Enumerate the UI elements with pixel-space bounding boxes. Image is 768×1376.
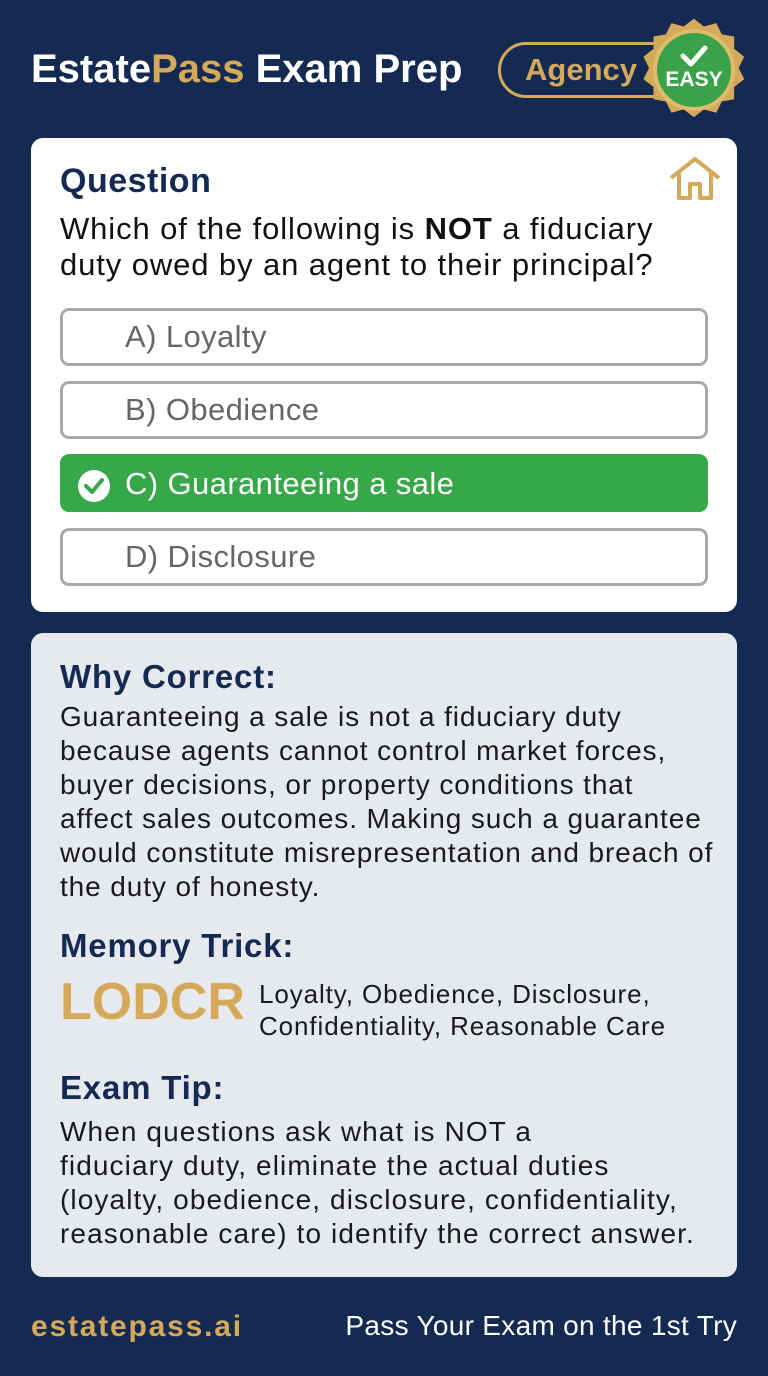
badge: Agency category pill (498, 42, 688, 98)
icon: EASY seal (644, 18, 744, 118)
heading: Question: Question (60, 162, 211, 200)
option A (60, 308, 708, 366)
icon: EASY seal: EASY (665, 68, 723, 91)
text: mnemonic meaning: Loyalty, Obedience, Disclosure, (259, 979, 651, 1009)
text: why correct: affect sales outcomes. Making such a guarantee (60, 803, 702, 834)
option A: A) Loyalty (125, 319, 267, 354)
text: why correct: would constitute misrepresentation and breach of (60, 837, 713, 868)
question text: Which of the following is NOT a fiduciary (60, 211, 653, 246)
option B: B) Obedience (125, 392, 319, 427)
panel: explanation (31, 633, 737, 1277)
text: mnemonic meaning (259, 979, 666, 1041)
panel: question (31, 138, 737, 612)
icon: house (670, 157, 720, 200)
option D: D) Disclosure (125, 539, 316, 574)
option B (60, 381, 708, 439)
text: why correct: the duty of honesty. (60, 871, 320, 902)
option C correct: C) Guaranteeing a sale (125, 466, 454, 501)
footer: brand: estatepass.ai (31, 1310, 243, 1343)
heading: Why Correct: Why Correct: (60, 658, 277, 695)
title: EstatePass Exam Prep (31, 47, 462, 91)
option D (60, 528, 708, 586)
text: exam tip: When questions ask what is NOT a (60, 1116, 532, 1147)
footer: tagline: Pass Your Exam on the 1st Try (345, 1310, 737, 1341)
text: why correct: Guaranteeing a sale is not a fiduciary duty (60, 701, 622, 732)
text: exam tip (60, 1116, 695, 1249)
badge: Agency category pill: Agency (525, 52, 637, 87)
question text (60, 211, 654, 282)
text: exam tip: reasonable care) to identify the correct answer. (60, 1218, 695, 1249)
text: why correct: buyer decisions, or property conditions that (60, 769, 633, 800)
heading: Memory Trick: Memory Trick: (60, 927, 294, 964)
text: why correct: because agents cannot control market forces, (60, 735, 666, 766)
mnemonic LODCR: LODCR (60, 973, 245, 1031)
text: exam tip: fiduciary duty, eliminate the actual duties (60, 1150, 610, 1181)
text: why correct (60, 701, 713, 902)
question text: duty owed by an agent to their principal? (60, 247, 654, 282)
option C correct (60, 454, 708, 512)
text: exam tip: (loyalty, obedience, disclosure, confidentiality, (60, 1184, 678, 1215)
heading: Exam Tip: Exam Tip: (60, 1069, 224, 1106)
text: mnemonic meaning: Confidentiality, Reasonable Care (259, 1011, 666, 1041)
